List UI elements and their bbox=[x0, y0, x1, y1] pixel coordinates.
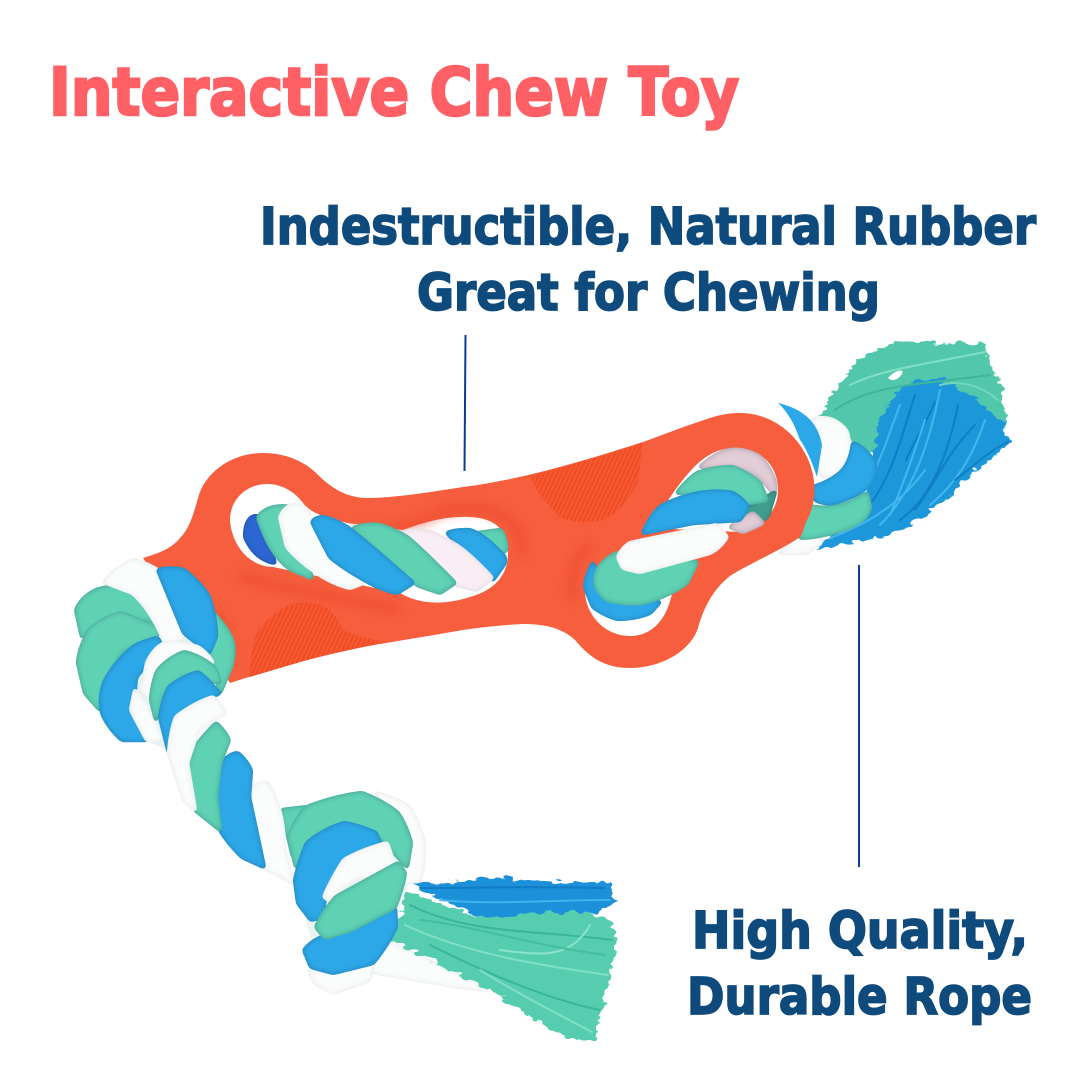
lower frayed rope end bbox=[373, 878, 616, 1040]
product illustration: rubber bone toy with rope bbox=[76, 340, 1010, 1040]
callout: durable rope: High Quality, bbox=[692, 902, 1028, 961]
knot base fill bbox=[90, 600, 215, 750]
ribbed grip patch upper right bbox=[500, 443, 643, 522]
teal fray gap bbox=[888, 371, 903, 380]
white small strand bbox=[131, 690, 162, 740]
leader line: rubber bbox=[464, 335, 466, 471]
teal top loop bbox=[289, 793, 411, 867]
white strand left bbox=[280, 505, 363, 588]
teal strand bbox=[800, 493, 870, 538]
teal upper strand bbox=[76, 586, 162, 637]
teal inner bbox=[151, 652, 220, 720]
right frayed rope end bbox=[813, 340, 1010, 550]
blue strand centre bbox=[312, 517, 413, 593]
callout: durable rope: Durable Rope bbox=[687, 968, 1032, 1027]
white front strand bbox=[618, 525, 727, 572]
teal lower strand bbox=[78, 613, 162, 710]
blue crescent bbox=[778, 403, 822, 477]
teal back piece bbox=[282, 807, 307, 857]
fray fibres bbox=[830, 352, 1008, 538]
dark teal inner strand bbox=[745, 492, 775, 528]
lower blue strand bbox=[585, 563, 660, 619]
blue twist bbox=[215, 753, 264, 867]
teal inner bbox=[316, 863, 405, 938]
title: Interactive Chew Toy bbox=[49, 54, 739, 131]
rubber bone body with holes bbox=[143, 413, 814, 683]
white stub low bbox=[780, 537, 823, 553]
blue inner bbox=[160, 672, 220, 753]
rope inside left hole bbox=[245, 505, 506, 593]
blue strand bbox=[813, 443, 875, 503]
white strand bbox=[813, 418, 849, 477]
inner hole shading bbox=[215, 508, 590, 665]
blue top strand bbox=[158, 568, 216, 653]
white strand far right bbox=[403, 531, 492, 590]
teal strand behind bbox=[209, 613, 233, 693]
callout: natural rubber: Great for Chewing bbox=[417, 264, 880, 323]
white outer loop bbox=[376, 793, 424, 883]
blue strand bbox=[295, 823, 380, 920]
white inner bbox=[324, 843, 395, 900]
white strand bbox=[104, 560, 185, 643]
callout: natural rubber bbox=[260, 198, 1036, 323]
rope stubs beside right end of bone bbox=[778, 403, 875, 553]
white bottom loop bbox=[309, 963, 373, 993]
tail fibres bbox=[405, 887, 612, 1032]
blue bottom bbox=[304, 908, 396, 973]
blue loop bbox=[101, 638, 162, 740]
leader line: rope bbox=[858, 565, 860, 867]
lower teal strand bbox=[595, 553, 697, 603]
ribbed grip patch lower left bbox=[250, 603, 387, 677]
blue strand far right bbox=[447, 530, 505, 580]
twisted rope middle bbox=[169, 697, 307, 883]
teal twist bbox=[187, 723, 229, 830]
white twist upper bbox=[169, 697, 225, 810]
blue fray bbox=[813, 378, 1010, 550]
teal strand centre bbox=[353, 525, 455, 593]
teal tail bbox=[391, 890, 616, 1040]
lower knot bbox=[289, 793, 424, 993]
knot base fill bbox=[300, 820, 410, 970]
blue front strand bbox=[643, 492, 748, 533]
white twist lower bbox=[247, 783, 293, 883]
rope inside right holes bbox=[585, 450, 775, 619]
left knot bbox=[76, 560, 233, 753]
teal strand left bbox=[258, 506, 312, 578]
teal fray bbox=[820, 340, 1005, 470]
pale bit bbox=[730, 513, 763, 532]
teal back strand bbox=[677, 467, 767, 503]
white tail bbox=[373, 943, 489, 990]
dark blue strand bbox=[245, 516, 275, 563]
blue tail bbox=[409, 878, 616, 917]
teal end piece bbox=[470, 530, 506, 555]
white inner top bbox=[142, 643, 213, 700]
pale back strand bbox=[700, 450, 775, 495]
callout: durable rope bbox=[687, 902, 1032, 1027]
